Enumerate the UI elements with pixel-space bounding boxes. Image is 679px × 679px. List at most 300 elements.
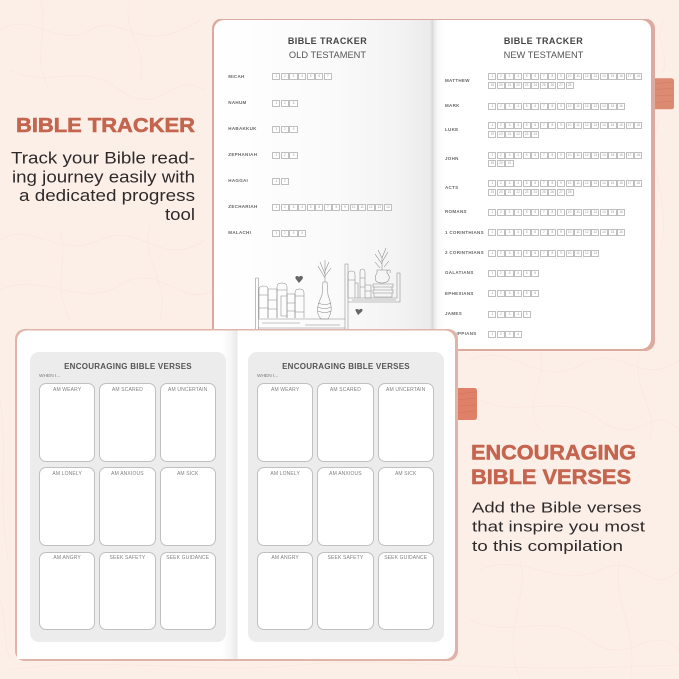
tracker row: John: 15 bbox=[611, 152, 614, 156]
tracker row: Romans: 1 bbox=[491, 210, 493, 214]
tracker row: Romans: 16 bbox=[619, 210, 623, 214]
tracker row: Acts: 12 bbox=[585, 181, 588, 185]
tracker row: Acts: 19 bbox=[491, 190, 494, 194]
tracker row: Acts: 16 bbox=[619, 181, 623, 185]
tracker row: Mark: 3 bbox=[509, 104, 510, 108]
tracker row: 2 Corinthians: 4 bbox=[517, 250, 519, 254]
verse cards: SEEK GUIDANCE bbox=[384, 555, 427, 561]
tracker row: Galatians bbox=[445, 270, 539, 277]
tracker row: Luke: 23 bbox=[525, 132, 528, 136]
tracker row: Philippians bbox=[445, 331, 522, 338]
tracker row: Acts: 6 bbox=[534, 181, 536, 185]
panel title: ENCOURAGING BIBLE VERSES bbox=[282, 362, 410, 370]
tracker row: Zechariah: ZECHARIAH bbox=[228, 204, 258, 209]
tracker row: Nahum bbox=[228, 100, 298, 107]
tracker row: John bbox=[445, 152, 642, 167]
tracker row: Matthew: 21 bbox=[508, 83, 511, 87]
notebook cover bbox=[212, 18, 655, 351]
tracker row: Luke: 9 bbox=[560, 123, 562, 127]
tracker row: 1 Corinthians: 7 bbox=[543, 230, 545, 234]
tracker row: Luke: 18 bbox=[636, 123, 640, 127]
verse cards: AM ANGRY bbox=[271, 555, 299, 561]
tracker row: Ephesians: 2 bbox=[500, 291, 502, 295]
tracker row: 1 Corinthians: 12 bbox=[585, 230, 588, 234]
tracker row: Romans: 2 bbox=[500, 210, 502, 214]
icon: heart lower bbox=[355, 309, 362, 315]
tracker row: Acts: 13 bbox=[594, 181, 597, 185]
verse cards: AM ANXIOUS bbox=[111, 471, 144, 477]
tracker row: Matthew: 13 bbox=[594, 74, 597, 78]
tracker row: Mark: 16 bbox=[619, 104, 623, 108]
tracker row: Micah: 3 bbox=[293, 74, 294, 78]
tracker row: Galatians: 3 bbox=[509, 271, 510, 275]
tracker row: Luke: 7 bbox=[543, 123, 545, 127]
tracker row: Acts: 28 bbox=[568, 190, 571, 194]
notebook: encouraging bible verses spread bbox=[15, 329, 477, 661]
panel title: ENCOURAGING BIBLE VERSES bbox=[64, 362, 192, 370]
tracker row: Ephesians bbox=[445, 290, 539, 297]
tracker row: Habakkuk bbox=[228, 126, 298, 133]
tracker row: John: 11 bbox=[576, 152, 580, 156]
tracker row: Mark: 5 bbox=[526, 104, 528, 108]
tracker row: John: 6 bbox=[534, 152, 536, 156]
tracker row: Mark: 6 bbox=[534, 104, 536, 108]
tracker row: Zechariah: 9 bbox=[344, 205, 346, 209]
tracker row: John: 20 bbox=[499, 161, 503, 165]
verse cards: AM SICK bbox=[177, 471, 199, 477]
tracker row: Malachi: 4 bbox=[301, 231, 303, 235]
tracker row: Luke: 24 bbox=[533, 132, 537, 136]
tracker row: Luke: 13 bbox=[594, 123, 597, 127]
tracker row: Micah: 5 bbox=[310, 74, 312, 78]
tracker row: Matthew: 5 bbox=[526, 74, 528, 78]
tracker row: Malachi: MALACHI bbox=[228, 230, 251, 235]
verse cards: AM SCARED bbox=[112, 387, 143, 393]
tracker row: Acts: 17 bbox=[628, 181, 631, 185]
tracker row: Habakkuk: 1 bbox=[275, 126, 277, 130]
tracker row: John: 16 bbox=[619, 152, 623, 156]
tracker row: 2 Corinthians: 13 bbox=[594, 250, 597, 254]
tracker row: Luke: 5 bbox=[526, 123, 528, 127]
tracker row: Matthew bbox=[445, 73, 642, 89]
tracker row: 2 Corinthians: 3 bbox=[509, 250, 510, 254]
tracker row: Romans: ROMANS bbox=[445, 209, 467, 214]
tracker row: Mark: 7 bbox=[543, 104, 545, 108]
tracker row: Zephaniah: ZEPHANIAH bbox=[228, 152, 257, 157]
tracker row: Mark: 15 bbox=[611, 104, 614, 108]
tracker row: Luke: 3 bbox=[509, 123, 510, 127]
tracker row: Micah bbox=[228, 73, 332, 80]
verse cards: AM ANGRY bbox=[53, 555, 81, 561]
tracker row: Mark: 8 bbox=[552, 104, 553, 108]
tracker row: 2 Corinthians: 1 bbox=[491, 250, 493, 254]
tracker row: Galatians: 5 bbox=[526, 271, 528, 275]
tracker row: Mark: 10 bbox=[568, 104, 571, 108]
tracker row: Ephesians: 5 bbox=[526, 291, 528, 295]
tracker row: Acts: 3 bbox=[509, 181, 510, 185]
tracker row: John: 21 bbox=[508, 161, 511, 165]
tracker row: Zechariah: 10 bbox=[352, 205, 355, 209]
tracker row: Acts: 24 bbox=[533, 190, 537, 194]
tracker row: Mark bbox=[445, 103, 625, 110]
tracker row: Matthew: MATTHEW bbox=[445, 78, 470, 83]
tracker row: Romans: 9 bbox=[560, 210, 562, 214]
when label: WHEN I... bbox=[39, 374, 60, 379]
tracker row: Matthew: 15 bbox=[611, 74, 614, 78]
tracker row: Mark: 2 bbox=[500, 104, 502, 108]
tracker row: Matthew: 3 bbox=[509, 74, 510, 78]
tracker row: Romans: 8 bbox=[552, 210, 553, 214]
tracker row: Zechariah: 14 bbox=[386, 205, 390, 209]
tracker row: Matthew: 11 bbox=[576, 74, 580, 78]
tracker row: John: 5 bbox=[526, 152, 528, 156]
tracker row: Mark: MARK bbox=[445, 103, 460, 108]
tracker row: 1 Corinthians: 14 bbox=[602, 230, 606, 234]
tracker row: Luke: 1 bbox=[491, 123, 493, 127]
tracker row: Acts: 26 bbox=[551, 190, 554, 194]
tracker row: Galatians: GALATIANS bbox=[445, 270, 474, 275]
verse cards: AM ANXIOUS bbox=[329, 471, 362, 477]
tracker row: Mark: 11 bbox=[576, 104, 580, 108]
left page bbox=[17, 330, 238, 659]
text: bible tracker description: Track your Bible read- bbox=[11, 149, 195, 167]
tracker row: Matthew: 19 bbox=[491, 83, 494, 87]
verse cards: AM LONELY bbox=[270, 471, 300, 477]
tracker row: Zechariah: 2 bbox=[284, 205, 286, 209]
tracker row: Zephaniah bbox=[228, 152, 298, 159]
tracker row: Mark: 13 bbox=[594, 104, 597, 108]
tracker row: 1 Corinthians: 9 bbox=[560, 230, 562, 234]
tracker row: Luke: 6 bbox=[534, 123, 536, 127]
tracker row: Matthew: 7 bbox=[543, 74, 545, 78]
notebook: bible tracker spread bbox=[212, 19, 674, 351]
tracker row: Galatians: 2 bbox=[500, 271, 502, 275]
tracker row: 1 Corinthians bbox=[445, 229, 625, 236]
right page bbox=[433, 20, 651, 349]
tracker row: Romans: 11 bbox=[576, 210, 580, 214]
tracker row: 2 Corinthians: 2 bbox=[500, 250, 502, 254]
tracker row: Luke: LUKE bbox=[445, 127, 458, 132]
tracker row: Mark: 12 bbox=[585, 104, 588, 108]
tracker row: Micah: MICAH bbox=[228, 74, 245, 79]
tracker row: 1 Corinthians: 1 CORINTHIANS bbox=[445, 230, 484, 235]
tracker row: Matthew: 8 bbox=[552, 74, 553, 78]
tracker row: Philippians: 2 bbox=[500, 332, 502, 336]
tracker row: Luke: 21 bbox=[508, 132, 511, 136]
text: encouraging verses description: to this compilation bbox=[472, 538, 623, 555]
tracker row: Matthew: 6 bbox=[534, 74, 536, 78]
text: bible tracker description: ing journey easily with bbox=[12, 168, 195, 186]
tracker row: Matthew: 18 bbox=[636, 74, 640, 78]
tracker row: Luke: 14 bbox=[602, 123, 606, 127]
tracker row: Matthew: 26 bbox=[551, 83, 554, 87]
tracker row: 2 Corinthians: 2 CORINTHIANS bbox=[445, 250, 484, 255]
tracker row: Luke bbox=[445, 122, 642, 138]
tracker row: Matthew: 10 bbox=[568, 74, 571, 78]
icon: heart upper bbox=[295, 276, 303, 283]
page title: old testament bbox=[288, 36, 367, 60]
tracker row: Luke: 8 bbox=[552, 123, 553, 127]
tracker row: Micah: 4 bbox=[301, 74, 303, 78]
tracker row: Mark: 14 bbox=[602, 104, 606, 108]
tracker row: John: 7 bbox=[543, 152, 545, 156]
tracker row: Habakkuk: HABAKKUK bbox=[228, 126, 257, 131]
verse cards: AM SCARED bbox=[330, 387, 361, 393]
panel: right verses grid bbox=[248, 352, 444, 642]
verse cards bbox=[257, 383, 434, 630]
tracker row: Habakkuk: 2 bbox=[284, 126, 286, 130]
tracker row: 2 Corinthians: 7 bbox=[543, 250, 545, 254]
text: encouraging verses description: Add the Bible verses bbox=[472, 500, 642, 517]
tracker row: 2 Corinthians: 5 bbox=[526, 250, 528, 254]
tracker row: John: 3 bbox=[509, 152, 510, 156]
tracker row: Mark: 4 bbox=[517, 104, 519, 108]
tracker row: John: 10 bbox=[568, 152, 571, 156]
page title: new testament bbox=[504, 36, 584, 60]
tracker row: Zechariah: 13 bbox=[378, 205, 381, 209]
tracker row: Zechariah: 5 bbox=[310, 205, 312, 209]
tracker row: John: 13 bbox=[594, 152, 597, 156]
tracker row: Nahum: 2 bbox=[284, 100, 286, 104]
text: encouraging verses description: that inspire you most bbox=[472, 519, 646, 536]
tracker row: Acts: 25 bbox=[542, 190, 546, 194]
tracker row: Micah: 6 bbox=[318, 74, 320, 78]
tracker row: John: 2 bbox=[500, 152, 502, 156]
tracker row: Romans: 3 bbox=[509, 210, 510, 214]
tracker row: Zechariah: 8 bbox=[336, 205, 337, 209]
tracker row: Romans: 13 bbox=[594, 210, 597, 214]
tracker row: Acts: 27 bbox=[559, 190, 563, 194]
tracker row: Zechariah: 6 bbox=[318, 205, 320, 209]
heading: encouraging bible verses: ENCOURAGING bbox=[471, 441, 636, 464]
tracker row: Luke: 20 bbox=[499, 132, 503, 136]
verse cards: AM LONELY bbox=[52, 471, 82, 477]
tracker row: Malachi: 1 bbox=[275, 231, 277, 235]
tracker row: Acts: 15 bbox=[611, 181, 614, 185]
tracker row: Luke: 17 bbox=[628, 123, 631, 127]
verse cards: AM UNCERTAIN bbox=[168, 387, 207, 393]
tracker row: Luke: 15 bbox=[611, 123, 614, 127]
tracker row: Matthew: 9 bbox=[560, 74, 562, 78]
tracker row: John: 18 bbox=[636, 152, 640, 156]
verse cards: SEEK SAFETY bbox=[328, 555, 363, 561]
tracker row: Malachi: 3 bbox=[293, 231, 294, 235]
tracker row: Luke: 2 bbox=[500, 123, 502, 127]
tracker row: James bbox=[445, 311, 531, 318]
right page bbox=[238, 330, 455, 659]
tracker row: Matthew: 16 bbox=[619, 74, 623, 78]
tracker row: Zechariah: 12 bbox=[369, 205, 372, 209]
page title: new testament: NEW TESTAMENT bbox=[504, 50, 583, 60]
tracker row: John: 19 bbox=[491, 161, 494, 165]
heading: encouraging bible verses: BIBLE VERSES bbox=[471, 466, 631, 489]
tracker row: 2 Corinthians: 12 bbox=[585, 250, 588, 254]
tracker row: Zephaniah: 1 bbox=[275, 152, 277, 156]
tracker row: 1 Corinthians: 11 bbox=[576, 230, 580, 234]
tracker row: Matthew: 12 bbox=[585, 74, 588, 78]
tracker row: 2 Corinthians: 8 bbox=[552, 250, 553, 254]
tracker row: Acts: 14 bbox=[602, 181, 606, 185]
tracker row: 1 Corinthians: 4 bbox=[517, 230, 519, 234]
tracker row: Nahum: NAHUM bbox=[228, 100, 247, 105]
tracker row: Matthew: 2 bbox=[500, 74, 502, 78]
tracker row: Habakkuk: 3 bbox=[293, 126, 294, 130]
tracker row: Acts: 8 bbox=[552, 181, 553, 185]
tracker row: Haggai: 1 bbox=[275, 178, 277, 182]
tracker row: Galatians: 4 bbox=[517, 271, 519, 275]
tracker row: Matthew: 14 bbox=[602, 74, 606, 78]
tracker row: Ephesians: 1 bbox=[491, 291, 493, 295]
tracker row: Romans: 7 bbox=[543, 210, 545, 214]
tracker row: Romans: 14 bbox=[602, 210, 606, 214]
tracker row: James: 3 bbox=[509, 312, 510, 316]
tracker row: Micah: 1 bbox=[275, 74, 277, 78]
tracker row: Acts: 11 bbox=[576, 181, 580, 185]
tracker row: Matthew: 20 bbox=[499, 83, 503, 87]
tracker row: 2 Corinthians: 9 bbox=[560, 250, 562, 254]
tracker row: Matthew: 1 bbox=[491, 74, 493, 78]
tracker row: Matthew: 28 bbox=[568, 83, 571, 87]
tracker row: Haggai bbox=[228, 178, 289, 185]
verse cards: AM SICK bbox=[395, 471, 417, 477]
tracker row: Mark: 1 bbox=[491, 104, 493, 108]
tracker row: John: 12 bbox=[585, 152, 588, 156]
verse cards: SEEK SAFETY bbox=[110, 555, 145, 561]
tracker row: Haggai: 2 bbox=[284, 178, 286, 182]
tracker row: 1 Corinthians: 3 bbox=[509, 230, 510, 234]
tracker row: Zechariah: 11 bbox=[360, 205, 364, 209]
tracker row: Romans: 12 bbox=[585, 210, 588, 214]
tracker row: Acts: 23 bbox=[525, 190, 528, 194]
tracker row: Romans: 6 bbox=[534, 210, 536, 214]
text: bible tracker description: a dedicated progress bbox=[19, 187, 195, 205]
tracker row: Philippians: 3 bbox=[509, 332, 510, 336]
tracker row: Nahum: 3 bbox=[293, 100, 294, 104]
panel: left verses grid bbox=[30, 352, 226, 642]
tracker row: Romans: 4 bbox=[517, 210, 519, 214]
illustration: bookshelf with vases bbox=[256, 248, 400, 329]
tracker row: James: 5 bbox=[526, 312, 528, 316]
tracker row: Nahum: 1 bbox=[275, 100, 277, 104]
tracker row: Luke: 19 bbox=[491, 132, 494, 136]
when label: WHEN I... bbox=[257, 374, 278, 379]
tracker row: Haggai: HAGGAI bbox=[228, 178, 248, 183]
tracker row: Acts: 7 bbox=[543, 181, 545, 185]
tracker row: Acts: 22 bbox=[516, 190, 520, 194]
tracker row: James: 2 bbox=[500, 312, 502, 316]
tracker row: 1 Corinthians: 16 bbox=[619, 230, 623, 234]
tracker row: John: 17 bbox=[628, 152, 631, 156]
tracker row: Acts: 1 bbox=[491, 181, 493, 185]
tracker row: Acts: 9 bbox=[560, 181, 562, 185]
tracker row: Romans: 15 bbox=[611, 210, 614, 214]
tracker row: Galatians: 6 bbox=[534, 271, 536, 275]
verse cards: AM UNCERTAIN bbox=[386, 387, 425, 393]
tracker row: Romans: 5 bbox=[526, 210, 528, 214]
elastic band tab bbox=[650, 78, 674, 109]
verse cards: SEEK GUIDANCE bbox=[166, 555, 209, 561]
tracker row: Acts: 21 bbox=[508, 190, 511, 194]
tracker row: Ephesians: EPHESIANS bbox=[445, 291, 474, 296]
tracker row: 1 Corinthians: 6 bbox=[534, 230, 536, 234]
tracker row: Luke: 16 bbox=[619, 123, 623, 127]
tracker row: Matthew: 25 bbox=[542, 83, 546, 87]
page title: old testament: OLD TESTAMENT bbox=[289, 50, 366, 60]
tracker row: Matthew: 24 bbox=[533, 83, 537, 87]
tracker row: Galatians: 1 bbox=[491, 271, 493, 275]
tracker row: Philippians: 4 bbox=[517, 332, 519, 336]
tracker row: 1 Corinthians: 2 bbox=[500, 230, 502, 234]
page title: old testament: BIBLE TRACKER bbox=[288, 36, 367, 46]
tracker row: Zechariah: 3 bbox=[293, 205, 294, 209]
tracker row: Acts: 5 bbox=[526, 181, 528, 185]
tracker row: Acts: 2 bbox=[500, 181, 502, 185]
tracker row: Romans: 10 bbox=[568, 210, 571, 214]
tracker row: Luke: 12 bbox=[585, 123, 588, 127]
tracker row: Matthew: 27 bbox=[559, 83, 563, 87]
text: bible tracker description bbox=[11, 149, 195, 224]
tracker row: Luke: 11 bbox=[576, 123, 580, 127]
tracker row: Ephesians: 3 bbox=[509, 291, 510, 295]
tracker row: James: 4 bbox=[517, 312, 519, 316]
verse cards bbox=[39, 383, 216, 630]
tracker row: Matthew: 23 bbox=[525, 83, 528, 87]
tracker row: 2 Corinthians bbox=[445, 250, 599, 257]
tracker row: Zechariah: 4 bbox=[301, 205, 303, 209]
verse cards: AM WEARY bbox=[271, 387, 299, 393]
tracker row: Matthew: 17 bbox=[628, 74, 631, 78]
tracker row: Zechariah: 1 bbox=[275, 205, 277, 209]
tracker row: James: JAMES bbox=[445, 311, 462, 316]
tracker row: Zephaniah: 3 bbox=[293, 152, 294, 156]
tracker row: Acts: 10 bbox=[568, 181, 571, 185]
tracker row: John: 8 bbox=[552, 152, 553, 156]
tracker row: 1 Corinthians: 10 bbox=[568, 230, 571, 234]
tracker row: Acts: ACTS bbox=[445, 185, 458, 190]
tracker row: Malachi bbox=[228, 230, 306, 237]
heading: bible tracker: BIBLE TRACKER bbox=[16, 115, 196, 137]
tracker row: Micah: 7 bbox=[327, 74, 329, 78]
tracker row: Ephesians: 6 bbox=[534, 291, 536, 295]
tracker row: Acts: 4 bbox=[517, 181, 519, 185]
tracker row: Micah: 2 bbox=[284, 74, 286, 78]
page title: new testament: BIBLE TRACKER bbox=[504, 36, 583, 46]
tracker row: 1 Corinthians: 13 bbox=[594, 230, 597, 234]
tracker row: Matthew: 22 bbox=[516, 83, 520, 87]
tracker row: Acts: 18 bbox=[636, 181, 640, 185]
tracker row: 1 Corinthians: 8 bbox=[552, 230, 553, 234]
tracker row: 2 Corinthians: 11 bbox=[576, 250, 580, 254]
tracker row: John: 4 bbox=[517, 152, 519, 156]
tracker row: Ephesians: 4 bbox=[517, 291, 519, 295]
tracker row: John: 9 bbox=[560, 152, 562, 156]
text: encouraging verses description bbox=[472, 500, 646, 555]
tracker row: John: JOHN bbox=[445, 156, 459, 161]
verse cards: AM WEARY bbox=[53, 387, 81, 393]
tracker row: Luke: 4 bbox=[517, 123, 519, 127]
tracker row: 1 Corinthians: 15 bbox=[611, 230, 614, 234]
elastic band tab bbox=[454, 388, 477, 420]
tracker row: 2 Corinthians: 6 bbox=[534, 250, 536, 254]
tracker row: Zephaniah: 2 bbox=[284, 152, 286, 156]
tracker row: 1 Corinthians: 1 bbox=[491, 230, 493, 234]
tracker row: Zechariah: 7 bbox=[327, 205, 329, 209]
tracker row: Mark: 9 bbox=[560, 104, 562, 108]
tracker row: Romans bbox=[445, 209, 625, 216]
text: bible tracker description: tool bbox=[165, 206, 195, 224]
tracker row: Philippians: 1 bbox=[491, 332, 493, 336]
tracker row: Luke: 22 bbox=[516, 132, 520, 136]
